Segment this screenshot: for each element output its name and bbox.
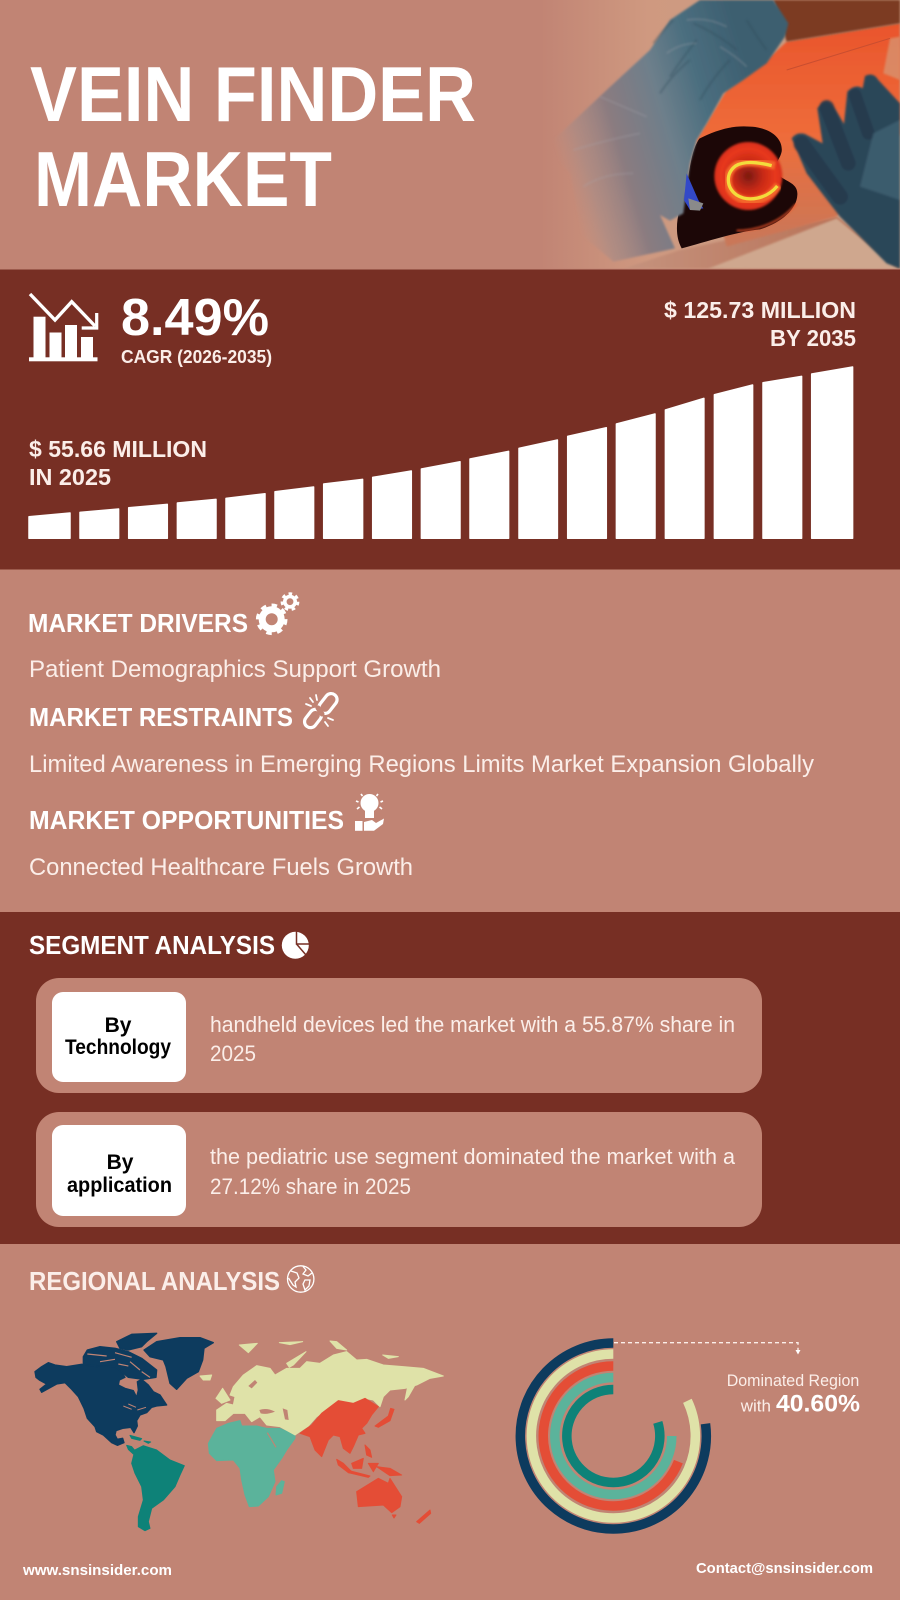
heading: market opportunities: MARKET OPPORTUNITIES xyxy=(29,805,344,835)
text: application finding: 27.12% share in 2025 xyxy=(210,1174,411,1199)
heading: market restraints: MARKET RESTRAINTS xyxy=(29,702,293,732)
panel: market size xyxy=(0,270,900,570)
card: by application xyxy=(36,1112,762,1227)
text: driver: Patient Demographics Support Growth xyxy=(29,656,441,683)
title: MARKET xyxy=(34,135,332,223)
icon: broken chain link xyxy=(302,691,340,730)
CAGR label: CAGR (2026-2035) xyxy=(121,346,272,367)
footer website: www.snsinsider.com xyxy=(22,1562,172,1579)
map: Africa and Middle East xyxy=(208,1421,295,1507)
text: opportunity: Connected Healthcare Fuels Growth xyxy=(29,854,413,881)
arrow: dashed leader to callout xyxy=(614,1343,800,1354)
label box: by technology xyxy=(52,992,186,1082)
icon: pie chart xyxy=(282,931,310,959)
text: restraint: Limited Awareness in Emerging Regions Limits Market Expansion Globally xyxy=(29,751,814,778)
heading: segment analysis: SEGMENT ANALYSIS xyxy=(29,930,275,960)
bar chart: growth 2025 to 2035 xyxy=(29,367,853,538)
radial bar chart xyxy=(520,1343,706,1529)
text: technology finding xyxy=(210,1012,735,1066)
2025 base label: IN 2025 xyxy=(29,464,111,490)
map: South America and Central America xyxy=(127,1435,184,1531)
footer contact: Contact@snsinsider.com xyxy=(696,1560,873,1577)
map: North America xyxy=(35,1333,213,1445)
panel: market dynamics xyxy=(28,594,814,881)
text: application finding: the pediatric use segment dominated the market with a xyxy=(210,1144,735,1169)
header photo: gloved hands using vein finder xyxy=(540,0,900,270)
2035 forecast label: $ 125.73 MILLION xyxy=(664,297,856,323)
label box: by application: application xyxy=(67,1174,172,1197)
icon: globe xyxy=(288,1266,314,1292)
icon: gears xyxy=(258,594,298,633)
2025 base label: $ 55.66 MILLION xyxy=(29,436,207,462)
title xyxy=(30,50,476,223)
CAGR value: 8.49% xyxy=(121,289,269,347)
text: technology finding: handheld devices led the market with a 55.87% share in xyxy=(210,1012,735,1037)
callout: dominated region: with xyxy=(740,1397,771,1416)
map: Europe and North Asia xyxy=(200,1341,443,1435)
callout: dominated region: 40.60% xyxy=(776,1391,860,1418)
label box: by technology: Technology xyxy=(65,1036,171,1059)
callout: dominated region: Dominated Region xyxy=(727,1371,859,1390)
map: Asia Pacific xyxy=(300,1398,431,1523)
panel: regional analysis xyxy=(29,1266,860,1531)
heading: regional analysis: REGIONAL ANALYSIS xyxy=(29,1266,280,1296)
heading: market drivers: MARKET DRIVERS xyxy=(28,608,248,638)
label box: by application xyxy=(52,1125,186,1216)
title: VEIN FINDER xyxy=(30,50,476,138)
label box: by application: By xyxy=(107,1151,134,1174)
label box: by technology: By xyxy=(105,1014,132,1037)
panel: segment analysis xyxy=(0,912,900,1244)
callout: dominated region xyxy=(727,1371,860,1418)
world map by region xyxy=(35,1333,443,1531)
2025 base label xyxy=(29,436,207,490)
text: technology finding: 2025 xyxy=(210,1041,256,1066)
card: by technology xyxy=(36,978,762,1093)
text: application finding xyxy=(210,1144,735,1199)
icon: chart with trend arrow xyxy=(29,294,98,361)
2035 forecast label xyxy=(664,297,856,351)
icon: hand holding light bulb xyxy=(355,794,384,831)
2035 forecast label: BY 2035 xyxy=(770,325,856,351)
